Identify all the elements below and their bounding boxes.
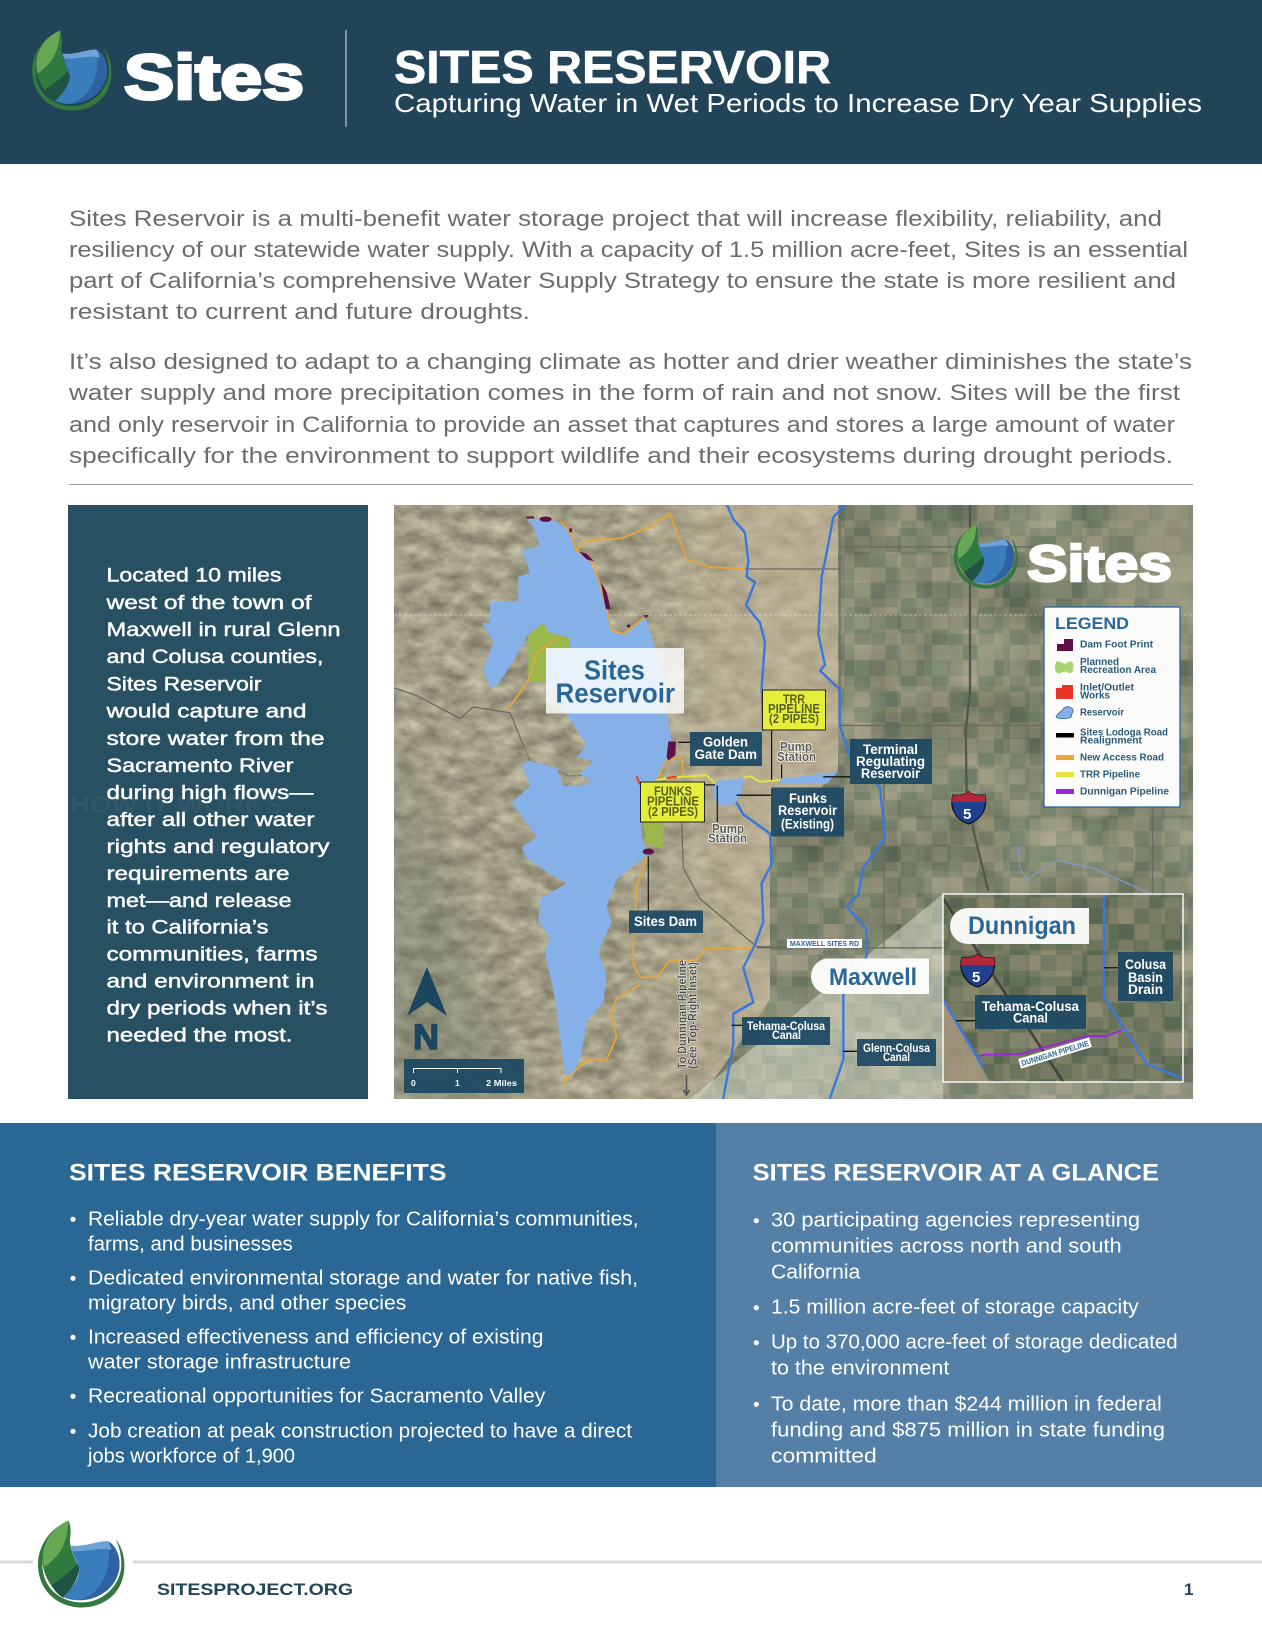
panel: location description — [68, 505, 368, 1099]
label: Sites Dam: Sites Dam — [634, 914, 697, 929]
legend item: reservoir — [1056, 706, 1124, 719]
label: Terminal Regulating Reservoir: Regulating — [856, 754, 925, 769]
benefits list: migratory birds, and other species — [88, 1292, 406, 1314]
label: Glenn-Colusa Canal: Glenn-Colusa — [863, 1043, 931, 1055]
benefits list: farms, and businesses — [88, 1233, 293, 1255]
website: SITESPROJECT.ORG — [157, 1580, 353, 1599]
glance list: 30 participating agencies representing — [771, 1210, 1140, 1232]
label: Tehama-Colusa Canal: Tehama-Colusa — [747, 1021, 826, 1033]
legend item: TRR pipeline: TRR Pipeline — [1080, 768, 1140, 780]
intro paragraph 1 — [69, 206, 1188, 324]
logo: map Sites — [954, 524, 1172, 592]
label: Colusa Basin Drain: Drain — [1128, 982, 1163, 997]
legend item: planned recreation area — [1055, 658, 1156, 674]
panel: location description: Sites Reservoir — [106, 673, 262, 695]
panel: location description: communities, farms — [106, 943, 318, 965]
intro paragraph 2: water supply and more precipitation comes in the form of rain and not snow. Sites will be the first — [68, 380, 1181, 405]
heading: SITES RESERVOIR AT A GLANCE — [753, 1160, 1159, 1187]
title: SITES RESERVOIR — [394, 41, 831, 93]
label: Funks Reservoir: Reservoir — [778, 803, 838, 818]
intro paragraph 2 — [68, 349, 1192, 468]
scale bar: 0 — [411, 1078, 416, 1088]
scale bar: 1 — [455, 1078, 460, 1088]
benefits list: Dedicated environmental storage and water for native fish, — [88, 1268, 638, 1290]
label: Funks Reservoir: (Existing) — [781, 816, 834, 832]
label: Dunnigan: Dunnigan — [968, 912, 1076, 940]
panel: location description: would capture and — [105, 701, 307, 723]
glance list: California — [771, 1261, 861, 1283]
label: Maxwell — [811, 958, 929, 994]
panel: location description: Sacramento River — [106, 755, 294, 777]
farm roads — [745, 505, 1153, 949]
label: pump station lower: Pump — [712, 822, 744, 836]
label: Funks pipeline: PIPELINE — [647, 795, 699, 809]
benefits list: jobs workforce of 1,900 — [87, 1445, 295, 1467]
legend item: Dunnigan pipeline: Dunnigan Pipeline — [1080, 786, 1169, 798]
reservoir — [482, 519, 672, 1079]
label: Colusa Basin Drain — [1118, 952, 1173, 1001]
legend item: planned recreation area: Recreation Area — [1080, 664, 1156, 676]
panel: location description: during high flows— — [106, 782, 314, 804]
legend item: road realignment — [1056, 726, 1168, 746]
label: Tehama-Colusa Canal — [742, 1017, 830, 1045]
glance list: funding and $875 million in state funding — [771, 1420, 1165, 1442]
label: Funks Reservoir: Funks — [789, 791, 827, 806]
map panel — [380, 490, 1210, 1120]
glance list: To date, more than $244 million in federal — [771, 1394, 1162, 1416]
label: Golden Gate Dam — [690, 732, 762, 766]
grey roads — [394, 688, 810, 948]
panel: location description: requirements are — [106, 863, 290, 885]
creek — [1018, 845, 1153, 895]
icon: interstate 5 shield — [952, 791, 986, 824]
label: pump station lower: Station — [708, 832, 747, 846]
label: to Dunnigan pipeline: To Dunnigan Pipeline — [675, 960, 689, 1069]
heading: SITES RESERVOIR BENEFITS — [69, 1160, 446, 1187]
intro paragraph 1: resistant to current and future droughts. — [69, 299, 530, 324]
legend item: road realignment: Realignment — [1080, 734, 1142, 746]
river: Glenn-Colusa — [818, 505, 885, 1098]
label: Glenn-Colusa Canal: Canal — [883, 1052, 910, 1064]
panel: location description: needed the most. — [106, 1024, 292, 1046]
label: Golden Gate Dam: Golden — [703, 734, 748, 750]
intro paragraph 2: It’s also designed to adapt to a changing climate as hotter and drier weather diminishes the state’s — [69, 349, 1192, 374]
label: Sites Reservoir: Sites — [584, 654, 645, 686]
subtitle: Capturing Water in Wet Periods to Increase Dry Year Supplies — [394, 88, 1202, 118]
label: Funks Reservoir — [771, 788, 844, 836]
panel: location description: it to California’s — [106, 916, 269, 938]
TRR pipeline — [657, 775, 780, 784]
panel: Sites Reservoir benefits — [0, 1123, 716, 1487]
legend item: inlet/outlet works — [1056, 683, 1134, 699]
icon: interstate 5 shield: 5 — [963, 806, 971, 823]
label: to Dunnigan pipeline: (See Top-Right Inset) — [686, 962, 700, 1069]
label: Tehama-Colusa Canal inset: Tehama-Colusa — [982, 999, 1079, 1014]
icon: north arrow: N — [413, 1018, 439, 1057]
scale bar: 2 Miles — [486, 1078, 517, 1088]
benefits list — [70, 1209, 639, 1467]
inlet works — [637, 776, 677, 784]
label: TRR pipeline: PIPELINE — [768, 702, 820, 716]
benefits list: water storage infrastructure — [87, 1351, 351, 1373]
icon: interstate 5 shield inset: 5 — [972, 969, 980, 986]
legend item: planned recreation area: Planned — [1080, 656, 1119, 668]
logo: Sites: Sites — [124, 43, 304, 113]
planned recreation areas — [528, 623, 663, 848]
intro paragraph 1: part of California’s comprehensive Water Supply Strategy to ensure the state is more resilient and — [69, 268, 1176, 293]
label: Funks pipeline: (2 PIPES) — [648, 805, 698, 819]
label: pump station upper: Pump — [780, 740, 812, 754]
label: Tehama-Colusa Canal inset — [975, 995, 1086, 1029]
legend — [1044, 607, 1180, 807]
panel: location description: rights and regulatory — [106, 836, 330, 858]
reservoir and map features — [394, 505, 838, 1098]
panel: location description: met—and release — [106, 890, 292, 912]
legend item: road realignment: Sites Lodoga Road — [1080, 726, 1168, 738]
glance list: 1.5 million acre-feet of storage capacity — [771, 1296, 1139, 1318]
icon: north arrow — [407, 967, 447, 1057]
inset map: Dunnigan — [943, 894, 1183, 1082]
benefits list: Reliable dry-year water supply for California’s communities, — [88, 1209, 639, 1231]
panel: Sites Reservoir at a glance — [716, 1123, 1262, 1487]
label: Tehama-Colusa Canal: Canal — [772, 1030, 801, 1042]
panel: location description: Located 10 miles — [106, 565, 282, 587]
label: pump station upper: Station — [777, 750, 816, 764]
legend item: inlet/outlet works: Inlet/Outlet — [1080, 682, 1134, 694]
legend item: inlet/outlet works: Works — [1080, 690, 1110, 702]
label: Golden Gate Dam: Gate Dam — [694, 747, 757, 762]
glance list — [754, 1210, 1178, 1467]
label: Maxwell: Maxwell — [829, 964, 917, 991]
label: TRR pipeline — [762, 690, 826, 730]
panel: location description: dry periods when it’s — [106, 997, 328, 1019]
header banner — [0, 0, 1262, 164]
label: TRR pipeline: TRR — [783, 693, 805, 707]
label: pump station upper — [776, 741, 816, 762]
panel: location description: west of the town of — [105, 592, 312, 614]
panel: location description: after all other water — [106, 809, 315, 831]
legend item: reservoir: Reservoir — [1080, 706, 1124, 718]
label: Glenn-Colusa Canal — [857, 1039, 936, 1066]
map terrain — [380, 490, 1210, 1120]
leader lines — [648, 730, 782, 1025]
benefits list: Recreational opportunities for Sacramento Valley — [88, 1386, 545, 1408]
glance list: committed — [771, 1445, 877, 1467]
label: Sites Reservoir — [546, 648, 684, 714]
legend item: TRR pipeline — [1056, 768, 1140, 780]
legend: LEGEND — [1055, 614, 1129, 633]
panel: location description: store water from the — [106, 728, 324, 750]
label: Sites Reservoir: Reservoir — [556, 678, 675, 708]
label: Colusa Basin Drain: Colusa — [1125, 957, 1166, 972]
label: Funks pipeline: FUNKS — [654, 785, 692, 799]
intro paragraph 2: and only reservoir in California to provide an asset that captures and stores a large amount of water — [69, 412, 1176, 437]
label: Tehama-Colusa Canal inset: Canal — [1013, 1010, 1048, 1026]
label: pump station lower — [708, 823, 747, 844]
label: Sites Dam — [629, 910, 703, 933]
logo: map Sites: Sites — [1027, 535, 1172, 592]
label: Dunnigan Pipeline: DUNNIGAN PIPELINE — [1020, 1039, 1090, 1068]
logo: Sites — [32, 30, 304, 113]
label: Terminal Regulating Reservoir — [850, 739, 932, 784]
logo: footer — [38, 1521, 124, 1607]
benefits list: Job creation at peak construction projected to have a direct — [88, 1421, 632, 1443]
label: Funks pipeline — [640, 782, 704, 822]
panel: location description: and Colusa counties, — [106, 646, 324, 668]
intro paragraph 1: resiliency of our statewide water supply. With a capacity of 1.5 million acre-feet, Sites is an essential — [69, 237, 1188, 262]
label: TRR pipeline: (2 PIPES) — [769, 712, 819, 726]
panel: location description: and environment in — [106, 970, 314, 992]
legend item: dam foot print: Dam Foot Print — [1080, 638, 1153, 650]
panel: location description: Maxwell in rural Glenn — [106, 619, 340, 641]
label: Dunnigan — [950, 908, 1089, 944]
icon: interstate 5 shield inset — [960, 954, 995, 987]
river: Tehama-Colusa — [723, 505, 772, 1098]
label: Colusa Basin Drain: Basin — [1128, 970, 1163, 985]
legend item: new access road: New Access Road — [1080, 752, 1164, 764]
terminal regulating reservoir — [780, 771, 838, 784]
scale bar — [404, 1059, 524, 1093]
label: to Dunnigan pipeline — [675, 960, 700, 1095]
label: Maxwell Sites Rd: MAXWELL SITES RD — [790, 941, 859, 948]
intro paragraph 2: specifically for the environment to support wildlife and their ecosystems during drought periods. — [69, 443, 1173, 468]
label: Terminal Regulating Reservoir: Reservoir — [861, 766, 921, 781]
glance list: to the environment — [771, 1357, 950, 1379]
page number: 1 — [1184, 1580, 1193, 1599]
label: Terminal Regulating Reservoir: Terminal — [863, 742, 918, 757]
intro paragraph 1: Sites Reservoir is a multi-benefit water storage project that will increase flexibility, reliability, and — [69, 206, 1162, 231]
glance list: Up to 370,000 acre-feet of storage dedicated — [771, 1331, 1178, 1353]
dam footprints — [527, 516, 676, 855]
glance list: communities across north and south — [771, 1236, 1122, 1258]
footer — [0, 1521, 1262, 1607]
benefits list: Increased effectiveness and efficiency of existing — [88, 1327, 543, 1349]
access roads — [507, 513, 757, 1083]
panel: location description: HOW IT WORKS — [70, 792, 283, 819]
Funks reservoir — [713, 778, 743, 805]
